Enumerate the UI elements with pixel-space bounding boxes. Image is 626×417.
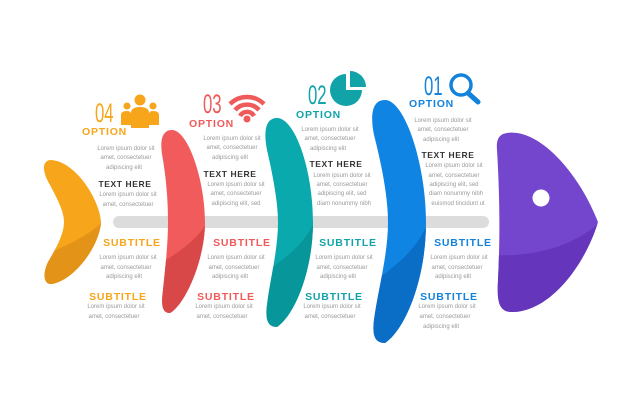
group 01: Lorem ipsum dolor sit bbox=[430, 255, 488, 261]
group 01: amet, consectetuer bbox=[417, 127, 469, 133]
group 02: adipiscing elit bbox=[320, 274, 356, 280]
group 02: diam nonummy nibh bbox=[317, 201, 371, 207]
group 02: 02 bbox=[308, 80, 327, 110]
icon: pie chart bbox=[330, 71, 366, 106]
group 02: TEXT HERE bbox=[309, 159, 363, 169]
group 03: SUBTITLE bbox=[197, 291, 255, 303]
group 02: amet, consectetuer bbox=[304, 136, 356, 142]
group 03: Lorem ipsum dolor sit bbox=[203, 136, 261, 142]
icon: people bbox=[121, 94, 159, 128]
group 02: adipiscing elit bbox=[310, 146, 346, 152]
group 02: amet, consectetuer bbox=[316, 265, 368, 271]
fin: red bbox=[161, 130, 205, 313]
group 01: adipiscing elit bbox=[435, 274, 471, 280]
group 03: adipiscing elit bbox=[212, 155, 248, 161]
group 01: SUBTITLE bbox=[434, 237, 492, 249]
group 02: SUBTITLE bbox=[319, 237, 377, 249]
text here: TEXT HERE bbox=[98, 179, 152, 189]
fin: yellow tail bbox=[44, 160, 101, 284]
group 03: amet, consectetuer bbox=[208, 265, 260, 271]
group 03: Lorem ipsum dolor sit bbox=[195, 304, 253, 310]
group 03: Lorem ipsum dolor sit bbox=[207, 255, 265, 261]
group 01 bbox=[409, 71, 492, 330]
lorem: adipiscing elit bbox=[106, 165, 142, 171]
group 03: adipiscing elit bbox=[212, 274, 248, 280]
group 02: Lorem ipsum dolor sit bbox=[315, 255, 373, 261]
group 01: 01 bbox=[424, 71, 443, 101]
group 01: OPTION bbox=[409, 98, 454, 110]
group 04: amet, consectetuer bbox=[102, 202, 154, 208]
group 04: adipiscing elit bbox=[106, 274, 142, 280]
group 03: OPTION bbox=[189, 118, 234, 130]
group 02: amet, consectetuer bbox=[304, 314, 356, 320]
OPTION: OPTION bbox=[82, 126, 127, 138]
group 04 bbox=[82, 94, 161, 320]
group 02: amet, consectetuer bbox=[316, 182, 368, 188]
spine bbox=[113, 216, 489, 228]
group 01: amet, consectetuer bbox=[431, 265, 483, 271]
group 01: diam nonummy nibh bbox=[429, 191, 483, 197]
icon: wifi bbox=[230, 97, 264, 122]
group 03: 03 bbox=[203, 89, 222, 119]
group 01: adipiscing elit bbox=[423, 137, 459, 143]
group 02: Lorem ipsum dolor sit bbox=[301, 127, 359, 133]
group 04: Lorem ipsum dolor sit bbox=[99, 255, 157, 261]
group 03: amet, consectetuer bbox=[196, 314, 248, 320]
group 02: SUBTITLE bbox=[305, 291, 363, 303]
group 01: amet, consectetuer bbox=[419, 314, 471, 320]
subtitle: SUBTITLE bbox=[103, 237, 161, 249]
group 04: Lorem ipsum dolor sit bbox=[99, 192, 157, 198]
fin: teal bbox=[265, 118, 313, 327]
group 03: amet, consectetuer bbox=[206, 145, 258, 151]
group 04: amet, consectetuer bbox=[88, 314, 140, 320]
group 02: Lorem ipsum dolor sit bbox=[313, 173, 371, 179]
group 01: SUBTITLE bbox=[420, 291, 478, 303]
group 03 bbox=[189, 89, 271, 320]
group 03: amet, consectetuer bbox=[210, 191, 262, 197]
group 02 bbox=[296, 71, 377, 320]
group 04: Lorem ipsum dolor sit bbox=[87, 304, 145, 310]
group 03: Lorem ipsum dolor sit bbox=[207, 182, 265, 188]
subtitle: SUBTITLE bbox=[89, 291, 147, 303]
group 01: TEXT HERE bbox=[421, 150, 475, 160]
group 04: amet, consectetuer bbox=[100, 265, 152, 271]
group 01: Lorem ipsum dolor sit bbox=[414, 118, 472, 124]
group 03: TEXT HERE bbox=[203, 169, 257, 179]
number 04: 04 bbox=[95, 98, 114, 128]
icon: magnifier bbox=[451, 75, 478, 102]
group 01: amet, consectetuer bbox=[428, 173, 480, 179]
group 01: adipiscing elit bbox=[423, 324, 459, 330]
lorem: amet, consectetuer bbox=[100, 155, 152, 161]
group 01: adipiscing elit, sed bbox=[429, 182, 479, 188]
group 03: adipiscing elit, sed bbox=[211, 201, 261, 207]
group 03: SUBTITLE bbox=[213, 237, 271, 249]
group 01: Lorem ipsum dolor sit bbox=[418, 304, 476, 310]
fin: blue bbox=[372, 100, 426, 343]
group 02: adipiscing elit, sed bbox=[317, 191, 367, 197]
group 02: OPTION bbox=[296, 109, 341, 121]
group 01: euismod tincidunt ut bbox=[431, 201, 485, 207]
group 02: Lorem ipsum dolor sit bbox=[303, 304, 361, 310]
lorem: Lorem ipsum dolor sit bbox=[97, 146, 155, 152]
eye bbox=[532, 190, 550, 206]
lorem bbox=[97, 146, 155, 171]
fish head bbox=[496, 132, 598, 312]
group 01: Lorem ipsum dolor sit bbox=[425, 163, 483, 169]
